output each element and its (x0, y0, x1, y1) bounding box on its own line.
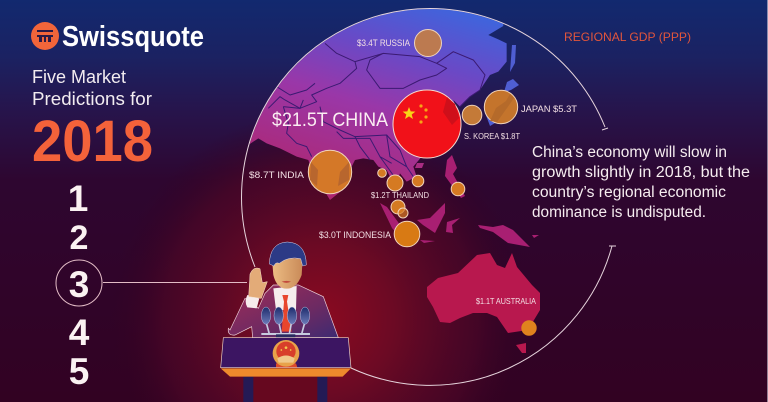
commentary text: growth slightly in 2018, but the (532, 164, 750, 181)
map labels: JAPAN $5.3T (521, 104, 577, 115)
globe outline arcs (242, 8, 616, 385)
bubble: Thailand (387, 175, 403, 191)
regional GDP heading: REGIONAL GDP (PPP) (564, 30, 691, 44)
land: Australia (427, 253, 540, 353)
national emblem (273, 340, 299, 367)
bubble: Indonesia (394, 221, 420, 247)
podium legs (243, 377, 327, 402)
prediction numbers: 2 (70, 219, 88, 257)
shirt (273, 286, 297, 310)
map: Asia-Pacific land (233, 0, 540, 353)
commentary text: country’s regional economic (532, 184, 726, 201)
bubble: Philippines (451, 182, 465, 196)
map labels: $1.1T AUSTRALIA (476, 296, 536, 306)
map labels: $1.2T THAILAND (371, 190, 429, 200)
commentary text (532, 144, 750, 221)
prediction numbers (68, 178, 90, 392)
commentary text: dominance is undisputed. (532, 204, 706, 221)
logo icon (31, 22, 59, 50)
bubble: India (308, 150, 352, 194)
speaker at podium (221, 242, 351, 402)
prediction numbers: 4 (69, 312, 90, 353)
bubble: Russia (414, 30, 442, 56)
head (269, 242, 306, 289)
bubble: Singapore (398, 208, 408, 218)
raised hand (249, 268, 267, 298)
map labels: $8.7T INDIA (249, 170, 305, 181)
title: Five Market (32, 66, 126, 87)
bubble: small northern Southeast Asia (378, 169, 386, 177)
title: Predictions for (32, 88, 152, 109)
podium shelf (221, 368, 351, 377)
highlight ring around 3 and connector (56, 260, 247, 306)
country borders (268, 43, 485, 180)
bubble: Australia (521, 320, 537, 336)
year: 2018 (32, 109, 153, 174)
GDP bubbles (308, 30, 537, 336)
map labels (249, 38, 577, 306)
logo wordmark: Swissquote (62, 21, 204, 53)
map labels: $3.0T INDONESIA (319, 230, 392, 241)
land: islands of Japan, Kamchatka and Taiwan (415, 45, 519, 168)
bubble: Vietnam (412, 175, 424, 187)
jacket (228, 285, 338, 338)
land: Asian mainland (250, 9, 507, 200)
prediction numbers: 3 (69, 264, 89, 305)
title (32, 66, 152, 109)
microphones (261, 307, 310, 338)
podium top (221, 338, 351, 368)
land: Southeast Asia islands (380, 155, 539, 247)
map labels: $3.4T RUSSIA (357, 38, 411, 49)
bubble: Japan (484, 90, 518, 124)
map labels: S. KOREA $1.8T (464, 131, 520, 141)
commentary text: China’s economy will slow in (532, 144, 727, 161)
China label: $21.5T CHINA (272, 110, 388, 131)
bubble: South Korea (462, 105, 482, 125)
prediction numbers: 5 (69, 351, 89, 392)
cuff (246, 295, 259, 308)
prediction numbers: 1 (68, 178, 88, 219)
bubble: China flag (393, 90, 461, 158)
bubble: Malaysia (391, 200, 405, 214)
tie (282, 295, 292, 332)
